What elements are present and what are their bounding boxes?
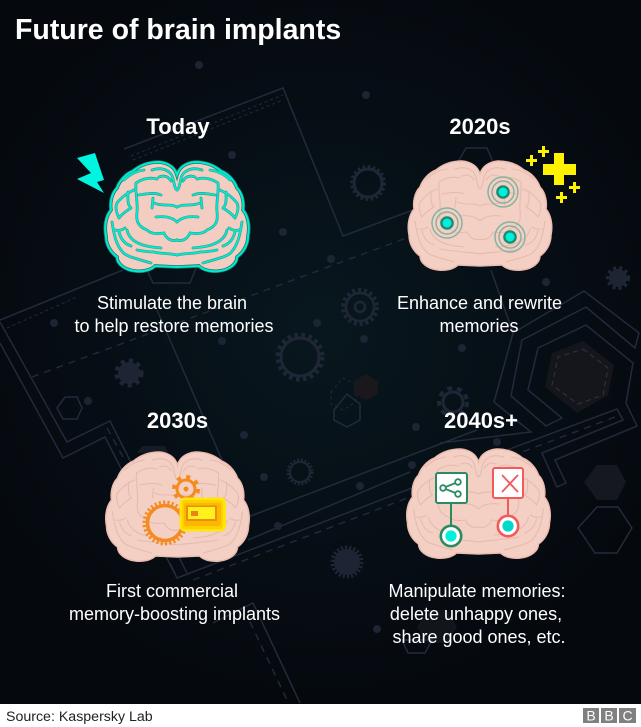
text: today description: to help restore memories: [74, 316, 274, 336]
background dots: [50, 61, 550, 633]
footer: [0, 704, 641, 727]
text: 2030s description: [69, 581, 280, 624]
text: 2020s description: memories: [439, 316, 519, 336]
panel: 2020s: [397, 114, 580, 336]
icon: delete node: [493, 468, 523, 536]
text: 2040s+ description: share good ones, etc.: [392, 627, 566, 647]
heading: 2020s: 2020s: [449, 114, 511, 139]
icon: yellow chip: [180, 498, 226, 532]
icon: brain with teal outline: [105, 162, 249, 271]
icon: large gear: [144, 502, 186, 544]
text: 2030s description: First commercial: [106, 581, 238, 601]
icon: brain with gears and chip: [106, 452, 249, 561]
BBC logo: B: [586, 708, 596, 724]
icon: small gear: [174, 477, 198, 501]
text: today description: Stimulate the brain: [97, 293, 247, 313]
text: 2040s+ description: [388, 581, 566, 647]
background gears: [117, 167, 628, 576]
panel: 2040s+: [388, 408, 566, 647]
hexagons: [57, 341, 632, 653]
text: 2030s description: memory-boosting implants: [69, 604, 280, 624]
BBC logo: [583, 708, 636, 724]
heading: today: Today: [146, 114, 210, 139]
icon: brain with share and delete nodes: [407, 449, 550, 558]
source note: Source: Kaspersky Lab: [6, 709, 153, 725]
text: 2040s+ description: delete unhappy ones,: [390, 604, 562, 624]
text: 2040s+ description: Manipulate memories:: [388, 581, 566, 601]
icon: lightning bolt: [77, 153, 104, 193]
BBC logo: C: [622, 708, 633, 724]
panel: today: [74, 114, 274, 336]
icon: share node: [436, 473, 467, 546]
heading: 2040s+: 2040s+: [444, 408, 518, 433]
panel: 2030s: [69, 408, 280, 624]
text: 2020s description: [397, 293, 562, 336]
heading: 2030s: 2030s: [147, 408, 208, 433]
text: today description: [74, 293, 274, 336]
text: 2020s description: Enhance and rewrite: [397, 293, 562, 313]
title: Future of brain implants: [15, 14, 341, 46]
BBC logo: B: [604, 708, 614, 724]
icon: yellow plus signs: [526, 146, 580, 203]
icon: brain with three targets: [408, 161, 552, 270]
